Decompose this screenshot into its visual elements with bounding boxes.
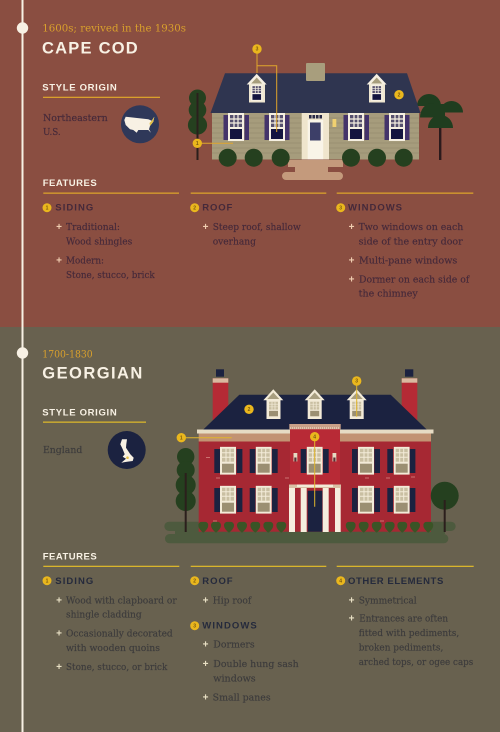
column: siding: Wood shingles — [66, 236, 133, 248]
icon: US map — [121, 105, 159, 143]
shrubs — [219, 149, 413, 167]
callout 1 — [193, 139, 202, 148]
column: roof: ROOF — [202, 203, 232, 214]
column: windows: Multi-pane windows — [359, 256, 458, 266]
column: windows: the chimney — [359, 289, 419, 300]
column: siding: Traditional: — [66, 222, 120, 233]
portico — [289, 484, 341, 532]
column: roof and windows: windows — [213, 673, 256, 684]
tree: left — [188, 90, 207, 160]
column: roof and windows: + — [203, 693, 209, 704]
column: roof and windows: WINDOWS — [202, 621, 257, 632]
windows and shutters — [224, 113, 410, 141]
column: roof and windows: Double hung sash — [213, 659, 299, 670]
column: other elements: Entrances are often — [359, 614, 448, 625]
callout 4: 4 — [313, 434, 316, 440]
column: windows: + — [349, 256, 355, 266]
column: roof and windows: 3 — [193, 623, 196, 629]
column: other elements: OTHER ELEMENTS — [348, 576, 443, 587]
ground — [164, 522, 456, 543]
walkway — [282, 160, 343, 180]
column: windows: 3 — [339, 205, 342, 211]
callout 3 — [352, 376, 361, 386]
panel: Cape Cod — [42, 24, 473, 300]
chimney — [306, 63, 325, 81]
column: siding — [42, 576, 177, 673]
column: siding: with wooden quoins — [66, 643, 160, 654]
date: 1600s; revived in the 1930s — [42, 24, 186, 35]
column: roof and windows: Small panes — [213, 693, 271, 704]
column: roof — [190, 203, 301, 248]
column: siding: + — [56, 629, 62, 640]
tree: left — [176, 448, 196, 532]
heading: features: FEATURES — [43, 178, 97, 189]
heading: style origin: STYLE ORIGIN — [42, 83, 117, 94]
column: roof and windows: + — [203, 640, 209, 651]
column: siding: SIDING — [55, 576, 93, 587]
heading: style origin: STYLE ORIGIN — [42, 407, 117, 418]
date: 1700-1830 — [42, 350, 93, 361]
column: other elements: broken pediments, — [359, 642, 443, 653]
callout 2 — [394, 90, 404, 99]
column: other elements: 4 — [339, 578, 342, 584]
timeline — [17, 0, 28, 732]
column: siding: + — [56, 595, 62, 606]
dormer: right — [367, 74, 387, 102]
text: origin — [43, 113, 108, 138]
column: windows — [336, 203, 470, 300]
column: roof and windows: 2 — [193, 578, 196, 584]
column: siding: Stone, stucco, or brick — [66, 662, 168, 673]
roof — [210, 73, 420, 113]
column: other elements: + — [349, 595, 355, 606]
column: other elements — [336, 576, 474, 668]
background: Georgian section — [0, 327, 500, 732]
dormers — [263, 389, 367, 419]
column: siding: Occasionally decorated — [66, 629, 173, 640]
column: windows: Dormer on each side of — [359, 274, 470, 286]
column: roof: + — [203, 222, 209, 233]
column: siding: Modern: — [66, 256, 104, 266]
text: origin: Northeastern — [43, 113, 108, 124]
callout 2: 2 — [398, 92, 401, 98]
column: siding: + — [56, 662, 62, 673]
column: roof and windows: ROOF — [202, 576, 233, 587]
tree: right — [417, 94, 463, 160]
column: roof: Steep roof, shallow — [213, 222, 301, 233]
callout 1 — [177, 433, 186, 442]
column: other elements: + — [349, 614, 355, 625]
column: windows: + — [349, 274, 355, 286]
column: siding: SIDING — [55, 203, 93, 214]
heading: Cape Cod: CAPE COD — [42, 39, 138, 57]
callout 2: 2 — [248, 407, 251, 413]
features: Cape Cod — [42, 178, 473, 300]
roof — [203, 395, 427, 430]
column: other elements: arched tops, or ogee caps — [359, 657, 474, 668]
callout 3 — [252, 44, 262, 54]
column: roof and windows — [190, 576, 299, 704]
callout lines — [181, 381, 357, 507]
panel: Georgian — [42, 350, 474, 704]
column: siding: 1 — [46, 578, 49, 584]
callout 4 — [310, 432, 319, 441]
column: other elements: fitted with pediments, — [359, 628, 459, 639]
wall — [212, 112, 419, 160]
windows and shutters — [214, 447, 415, 514]
background: Cape Cod section — [0, 0, 500, 327]
column: siding: 1 — [46, 205, 49, 211]
features: Georgian — [42, 552, 474, 704]
wall lanterns — [294, 453, 336, 462]
chimney: right — [402, 369, 417, 420]
column: roof and windows: Dormers — [213, 640, 255, 651]
column: siding: shingle cladding — [66, 610, 142, 621]
callout 3: 3 — [256, 47, 259, 53]
tree: right — [431, 482, 459, 532]
column: siding: Stone, stucco, brick — [66, 270, 155, 281]
column: roof and windows: Hip roof — [213, 595, 252, 606]
column: roof: overhang — [213, 236, 256, 248]
callout 1: 1 — [180, 435, 183, 441]
chimney: left — [213, 369, 228, 420]
text: origin: U.S. — [43, 127, 61, 138]
column: siding: + — [56, 222, 62, 233]
heading: Georgian: GEORGIAN — [42, 364, 142, 382]
column: siding — [42, 203, 155, 281]
column: windows: WINDOWS — [348, 203, 402, 214]
dormer: left — [247, 74, 267, 102]
column: siding: Wood with clapboard or — [66, 595, 177, 606]
icon: UK map — [108, 431, 146, 469]
callout 1: 1 — [196, 141, 199, 147]
lantern — [332, 119, 336, 127]
entry door — [302, 113, 329, 160]
callout 2 — [244, 405, 254, 414]
cornice — [197, 430, 434, 442]
heading: features: FEATURES — [43, 552, 97, 563]
column: windows: side of the entry door — [359, 236, 463, 248]
column: other elements: Symmetrical — [359, 595, 417, 606]
central pavilion — [289, 424, 341, 486]
column: roof: 2 — [193, 205, 196, 211]
callout lines — [197, 49, 277, 143]
brick wall — [199, 441, 431, 532]
column: roof and windows: + — [203, 595, 209, 606]
illustration: Georgian house — [164, 369, 459, 543]
shrubs — [198, 522, 433, 533]
column: roof and windows: + — [203, 659, 209, 670]
text: origin: England — [43, 445, 82, 456]
column: windows: Two windows on each — [359, 222, 463, 233]
callout 3: 3 — [355, 379, 358, 385]
column: windows: + — [349, 222, 355, 233]
illustration: Cape Cod house — [188, 44, 463, 180]
column: siding: + — [56, 256, 62, 266]
